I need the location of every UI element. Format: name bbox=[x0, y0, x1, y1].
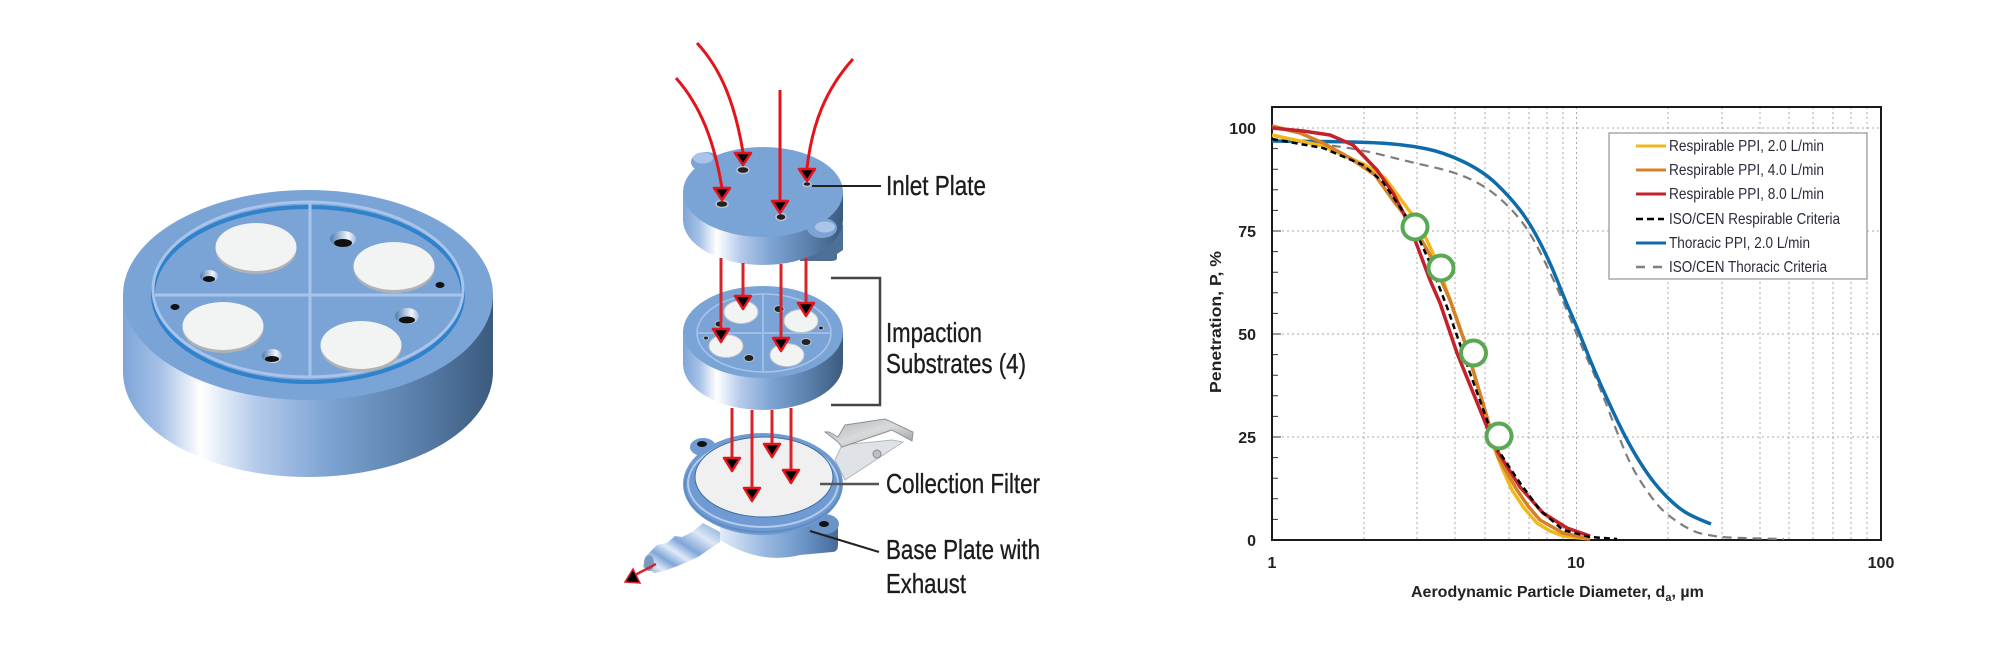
y axis labels: 75 bbox=[1238, 224, 1256, 241]
label: base plate with exhaust: Base Plate with bbox=[886, 534, 1040, 565]
label: inlet plate: Inlet Plate bbox=[886, 170, 986, 201]
impaction substrate plate bbox=[683, 286, 843, 410]
illustration: exploded impactor diagram bbox=[625, 43, 1040, 599]
curve: thoracic PPI 2.0 L/min bbox=[1272, 141, 1711, 524]
airflow arrows: inlet bbox=[676, 43, 853, 200]
legend: respirable 2.0: Respirable PPI, 2.0 L/min bbox=[1669, 138, 1824, 155]
y axis title: Penetration, P, % bbox=[1208, 251, 1225, 393]
legend: respirable 8.0: Respirable PPI, 8.0 L/min bbox=[1669, 186, 1824, 203]
recessed ring bbox=[153, 202, 463, 382]
y axis labels bbox=[1229, 121, 1256, 550]
base plate with exhaust bbox=[643, 433, 843, 573]
legend: ISO/CEN respirable: ISO/CEN Respirable Criteria bbox=[1669, 211, 1840, 228]
clamp bbox=[825, 419, 913, 480]
inlet plate bbox=[683, 147, 843, 265]
curve: ISO/CEN thoracic criteria bbox=[1272, 140, 1784, 539]
y axis labels: 100 bbox=[1229, 121, 1256, 138]
leader: collection filter bbox=[820, 483, 879, 485]
label: base plate with exhaust: Exhaust bbox=[886, 568, 966, 599]
curve: respirable PPI 4.0 L/min bbox=[1272, 126, 1590, 539]
substrate disc: bottom right bbox=[320, 321, 402, 372]
airflow arrows: to filter bbox=[732, 408, 791, 490]
label: collection filter: Collection Filter bbox=[886, 468, 1040, 499]
y axis labels: 25 bbox=[1238, 430, 1256, 447]
legend: ISO/CEN thoracic: ISO/CEN Thoracic Criteria bbox=[1669, 259, 1827, 276]
x axis labels: 10 bbox=[1567, 555, 1585, 572]
plate holes bbox=[170, 231, 444, 363]
x axis title: a bbox=[1665, 592, 1672, 604]
curve: respirable PPI 8.0 L/min bbox=[1272, 128, 1590, 536]
arrow heads: substrates bbox=[713, 296, 814, 351]
legend: thoracic 2.0: Thoracic PPI, 2.0 L/min bbox=[1669, 235, 1810, 252]
chart: penetration vs aerodynamic diameter bbox=[1208, 107, 1894, 604]
y axis labels: 0 bbox=[1247, 533, 1256, 550]
x axis title: Aerodynamic Particle Diameter, d bbox=[1411, 584, 1665, 601]
leader: inlet plate bbox=[812, 185, 881, 187]
curve: ISO/CEN respirable criteria bbox=[1272, 139, 1617, 539]
illustration: impactor substrate plate bbox=[123, 190, 493, 477]
green marker circles bbox=[1402, 214, 1512, 448]
legend bbox=[1609, 133, 1867, 279]
x axis title: , µm bbox=[1671, 584, 1704, 601]
arrow heads: inlet bbox=[714, 153, 815, 213]
label: impaction substrates: Impaction bbox=[886, 317, 982, 348]
substrate disc: top right bbox=[354, 242, 434, 293]
x axis labels: 100 bbox=[1868, 555, 1894, 572]
arrow heads: filter bbox=[724, 444, 799, 501]
plate side wall bbox=[123, 295, 493, 477]
airflow arrows: through substrates bbox=[721, 258, 806, 340]
curve: respirable PPI 2.0 L/min bbox=[1272, 135, 1590, 539]
exhaust arrow bbox=[625, 564, 656, 583]
legend: respirable 4.0: Respirable PPI, 4.0 L/min bbox=[1669, 162, 1824, 179]
plot frame bbox=[1272, 107, 1881, 540]
leader: base plate bbox=[810, 531, 879, 552]
label: impaction substrates: Substrates (4) bbox=[886, 348, 1026, 379]
y axis labels: 50 bbox=[1238, 327, 1256, 344]
x axis labels: 1 bbox=[1268, 555, 1277, 572]
plate top face bbox=[123, 190, 493, 400]
x axis labels bbox=[1268, 555, 1894, 572]
bracket: impaction substrates bbox=[831, 278, 880, 405]
substrate disc: top left bbox=[216, 223, 296, 274]
substrate disc: bottom left bbox=[182, 302, 264, 353]
